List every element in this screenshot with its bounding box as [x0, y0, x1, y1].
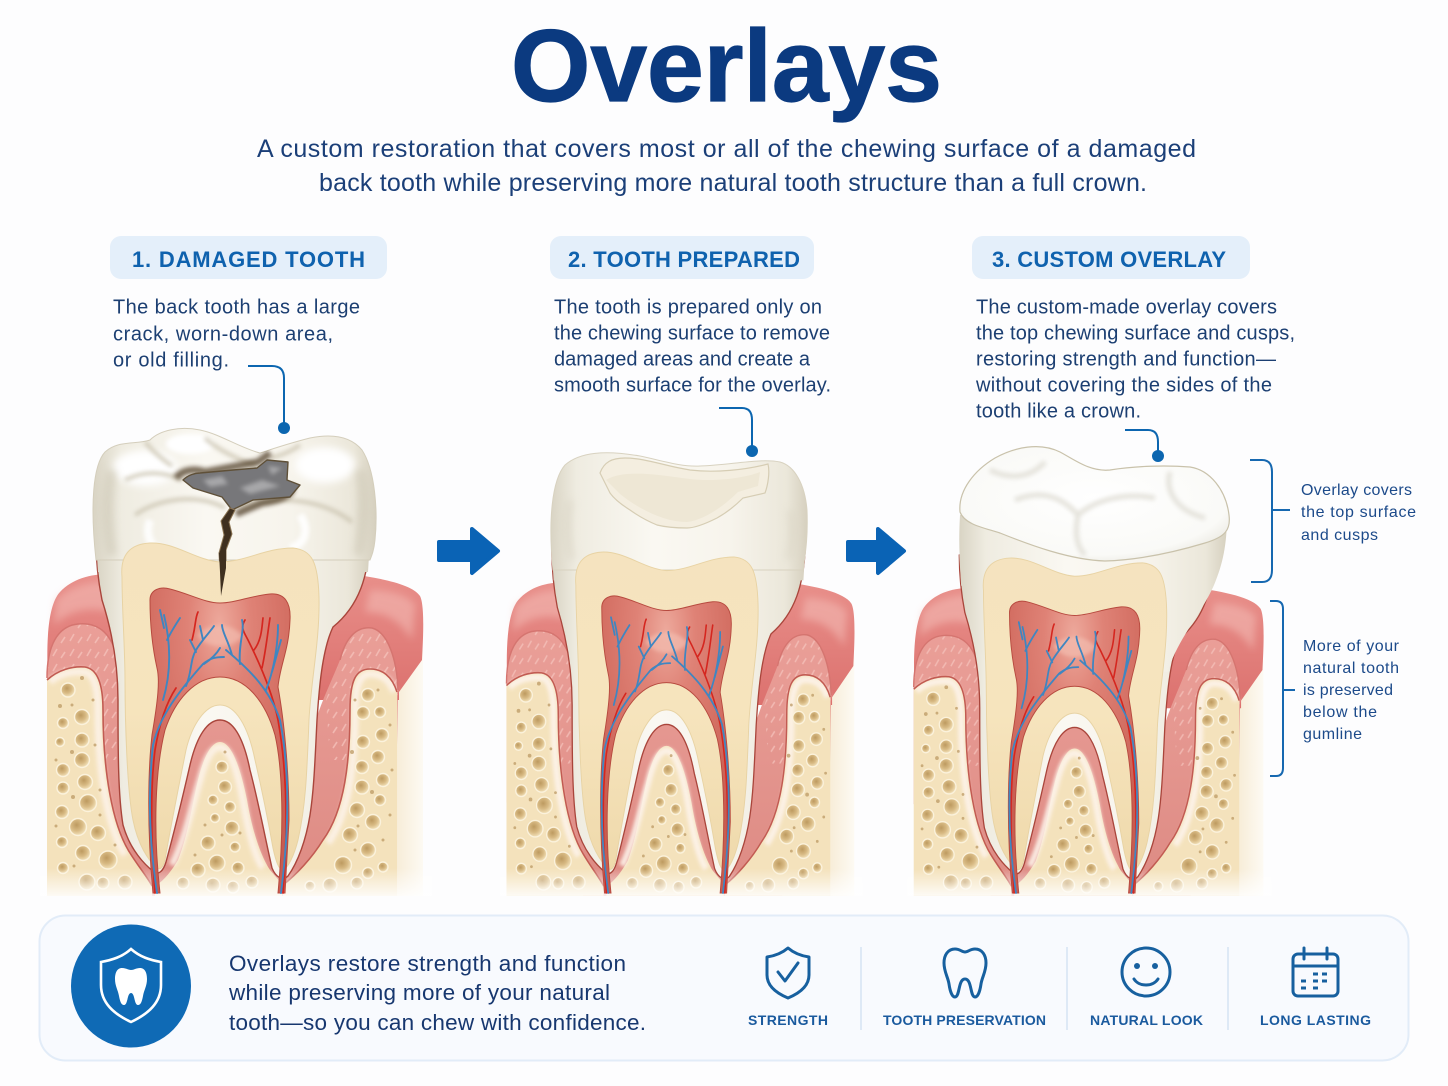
- step 3 description: the top chewing surface and cusps,: [976, 322, 1295, 344]
- prepared chewing surface: [600, 458, 769, 528]
- tooth illustration: damaged tooth with crack and old filling: [40, 428, 432, 896]
- note: preserved tooth: is preserved: [1303, 682, 1393, 699]
- step 3 description: tooth like a crown.: [976, 400, 1141, 422]
- subtitle: [257, 135, 1196, 197]
- step 1 description: The back tooth has a large: [113, 296, 360, 318]
- step 3 description: [975, 296, 1295, 422]
- title: Overlays: [511, 9, 942, 123]
- note: overlay covers: [1301, 482, 1416, 544]
- benefit: strength: STRENGTH: [748, 1012, 828, 1028]
- bracket: overlay region: [1250, 460, 1290, 582]
- step 3 description: The custom-made overlay covers: [976, 296, 1277, 318]
- panel: step 1 damaged tooth: [40, 236, 432, 896]
- note: preserved tooth: natural tooth: [1303, 660, 1399, 677]
- step 2 badge: 2. TOOTH PREPARED: [568, 247, 800, 272]
- note: overlay covers: Overlay covers: [1301, 482, 1412, 499]
- benefit: long lasting: LONG LASTING: [1260, 1012, 1371, 1028]
- step 1 description: or old filling.: [113, 350, 229, 372]
- step 3 badge: [972, 236, 1250, 279]
- tooth illustration: prepared tooth: [500, 453, 863, 896]
- subtitle: back tooth while preserving more natural tooth structure than a full crown.: [319, 169, 1147, 197]
- tooth illustration: tooth with overlay: [907, 447, 1272, 896]
- step 2 description: damaged areas and create a: [554, 348, 811, 370]
- summary text: [228, 951, 646, 1035]
- benefit: tooth preservation: TOOTH PRESERVATION: [883, 1012, 1046, 1028]
- benefit: long lasting: [1260, 948, 1371, 1028]
- leader line to prepared surface: [719, 408, 758, 457]
- step 1 description: [113, 296, 360, 372]
- icon: shield with tooth: [71, 924, 191, 1048]
- step 2 description: [554, 296, 831, 396]
- summary text: while preserving more of your natural: [228, 980, 610, 1005]
- note: preserved tooth: gumline: [1303, 726, 1362, 743]
- arrow: step 2 to step 3: [848, 529, 904, 573]
- note: preserved tooth: More of your: [1303, 638, 1400, 655]
- step 3 description: restoring strength and function—: [976, 348, 1276, 370]
- step 3 description: without covering the sides of the: [975, 374, 1272, 396]
- note: overlay covers: and cusps: [1301, 527, 1378, 544]
- subtitle: A custom restoration that covers most or all of the chewing surface of a damaged: [257, 135, 1196, 163]
- leader line to filling: [248, 366, 290, 434]
- step 1 badge: [110, 236, 387, 279]
- step 2 badge: [550, 236, 814, 279]
- step 1 description: crack, worn-down area,: [113, 324, 333, 346]
- note: overlay covers: the top surface: [1301, 504, 1416, 521]
- step 2 description: the chewing surface to remove: [554, 322, 830, 344]
- note: preserved tooth: below the: [1303, 704, 1377, 721]
- summary text: tooth—so you can chew with confidence.: [229, 1010, 646, 1035]
- step 1 badge: 1. DAMAGED TOOTH: [132, 247, 365, 272]
- step 3 badge: 3. CUSTOM OVERLAY: [992, 247, 1226, 272]
- benefit: strength: [748, 948, 828, 1028]
- panel: summary bar: [40, 916, 1408, 1060]
- arrow: step 1 to step 2: [439, 529, 498, 573]
- benefit: tooth preservation: [883, 949, 1046, 1028]
- benefit: natural look: [1090, 948, 1203, 1028]
- bracket: preserved region: [1270, 601, 1295, 776]
- note: preserved tooth: [1303, 638, 1400, 743]
- panel: step 2 tooth prepared: [500, 236, 863, 896]
- panel: step 3 custom overlay: [907, 236, 1416, 896]
- overlay restoration: [960, 447, 1229, 561]
- step 2 description: smooth surface for the overlay.: [554, 374, 831, 396]
- benefit: natural look: NATURAL LOOK: [1090, 1012, 1203, 1028]
- summary text: Overlays restore strength and function: [229, 951, 626, 976]
- leader line to overlay: [1125, 430, 1164, 462]
- step 2 description: The tooth is prepared only on: [554, 296, 822, 318]
